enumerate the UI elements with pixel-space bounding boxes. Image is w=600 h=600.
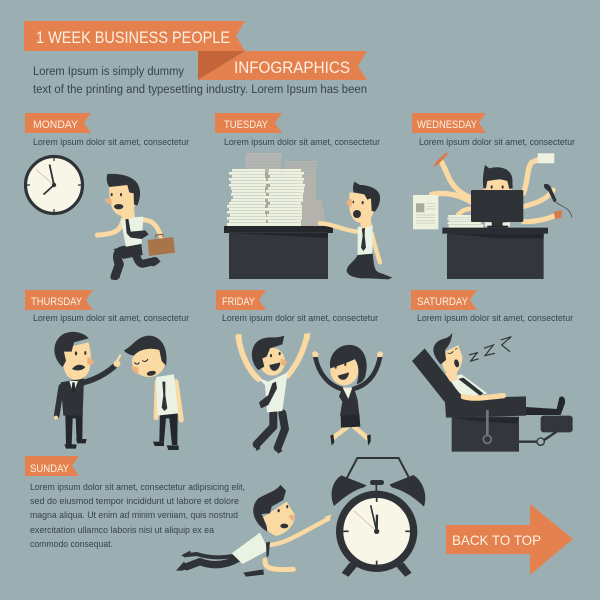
- running businessman with briefcase: [97, 174, 175, 280]
- tuesday text: Lorem ipsum dolor sit amet, consectetur: [224, 137, 380, 147]
- computer monitor: [471, 190, 523, 228]
- sunday text: magna aliqua. Ut enim ad minim veniam, quis nostrud: [30, 510, 238, 520]
- kneeling shocked businessman: [320, 182, 392, 279]
- sunday text: commodo consequat.: [30, 539, 113, 549]
- wednesday text: Lorem ipsum dolor sit amet, consectetur: [419, 137, 575, 147]
- saturday text: Lorem ipsum dolor sit amet, consectetur: [417, 313, 573, 323]
- friday label: [216, 290, 266, 310]
- icon: coffee cup: [554, 210, 562, 219]
- thursday text: Lorem ipsum dolor sit amet, consectetur: [33, 313, 189, 323]
- icon: document: [413, 195, 438, 229]
- jumping businesswoman: [312, 345, 383, 446]
- sunday label: SUNDAY: [30, 463, 70, 475]
- sunday label: [25, 456, 79, 476]
- paper pile: [447, 215, 483, 228]
- tuesday label: [215, 113, 282, 133]
- monday label: MONDAY: [33, 119, 79, 131]
- icon: telephone: [544, 184, 572, 218]
- boss: [54, 332, 120, 449]
- icon: alarm clock: [332, 458, 425, 576]
- sleeping man in recliner: [412, 333, 573, 452]
- title banner: INFOGRAPHICS: [234, 58, 350, 77]
- jumping businessman: [235, 332, 310, 454]
- saturday label: SATURDAY: [417, 296, 469, 308]
- back to top arrow: BACK TO TOP: [452, 532, 541, 548]
- sunday text: Lorem ipsum dolor sit amet, consectetur adipisicing elit,: [30, 482, 245, 492]
- boss scolding employee: [54, 332, 181, 450]
- saturday label: [411, 290, 477, 310]
- paper stacks: [227, 153, 325, 228]
- thursday label: THURSDAY: [31, 296, 83, 308]
- title banner: [24, 21, 367, 80]
- arms: [432, 159, 555, 222]
- back to top arrow: [446, 504, 573, 575]
- panel: tuesday: [215, 113, 392, 279]
- panel: friday: [216, 290, 383, 454]
- office desk: [224, 226, 333, 279]
- panel: saturday: [411, 290, 573, 452]
- sleeping man: [433, 333, 565, 415]
- wednesday label: WEDNESDAY: [417, 119, 478, 131]
- icon: pencil: [433, 152, 448, 167]
- sunday text: [30, 482, 245, 549]
- intro text: text of the printing and typesetting industry. Lorem Ipsum has been: [33, 84, 367, 96]
- head: [483, 165, 513, 191]
- friday label: FRIDAY: [222, 296, 256, 308]
- panel: thursday: [25, 290, 189, 450]
- multitasking office worker: [413, 152, 572, 279]
- businessman reaching for alarm clock: [176, 485, 332, 577]
- intro text: Lorem Ipsum is simply dummy: [33, 66, 184, 78]
- panel: sunday: [25, 456, 425, 577]
- sunday text: sed do eiusmod tempor incididunt ut labore et dolore: [30, 496, 239, 506]
- monday text: Lorem ipsum dolor sit amet, consectetur: [33, 137, 189, 147]
- sunday text: exercitation ullamco laboris nisi ut aliquip ex ea: [30, 525, 214, 535]
- icon: note: [538, 153, 554, 163]
- thursday label: [25, 290, 93, 310]
- panel: wednesday: [412, 113, 575, 279]
- snore marks: [469, 337, 511, 361]
- panel: monday: [25, 113, 189, 280]
- friday text: Lorem ipsum dolor sit amet, consectetur: [222, 313, 378, 323]
- wednesday label: [412, 113, 486, 133]
- employee: [124, 336, 181, 450]
- recliner: [412, 348, 573, 452]
- title banner: 1 WEEK BUSINESS PEOPLE: [36, 28, 230, 47]
- desk: [442, 228, 548, 279]
- tuesday label: TUESDAY: [224, 119, 269, 131]
- monday label: [25, 113, 91, 133]
- intro text: [33, 66, 367, 96]
- icon: wall clock: [25, 156, 83, 214]
